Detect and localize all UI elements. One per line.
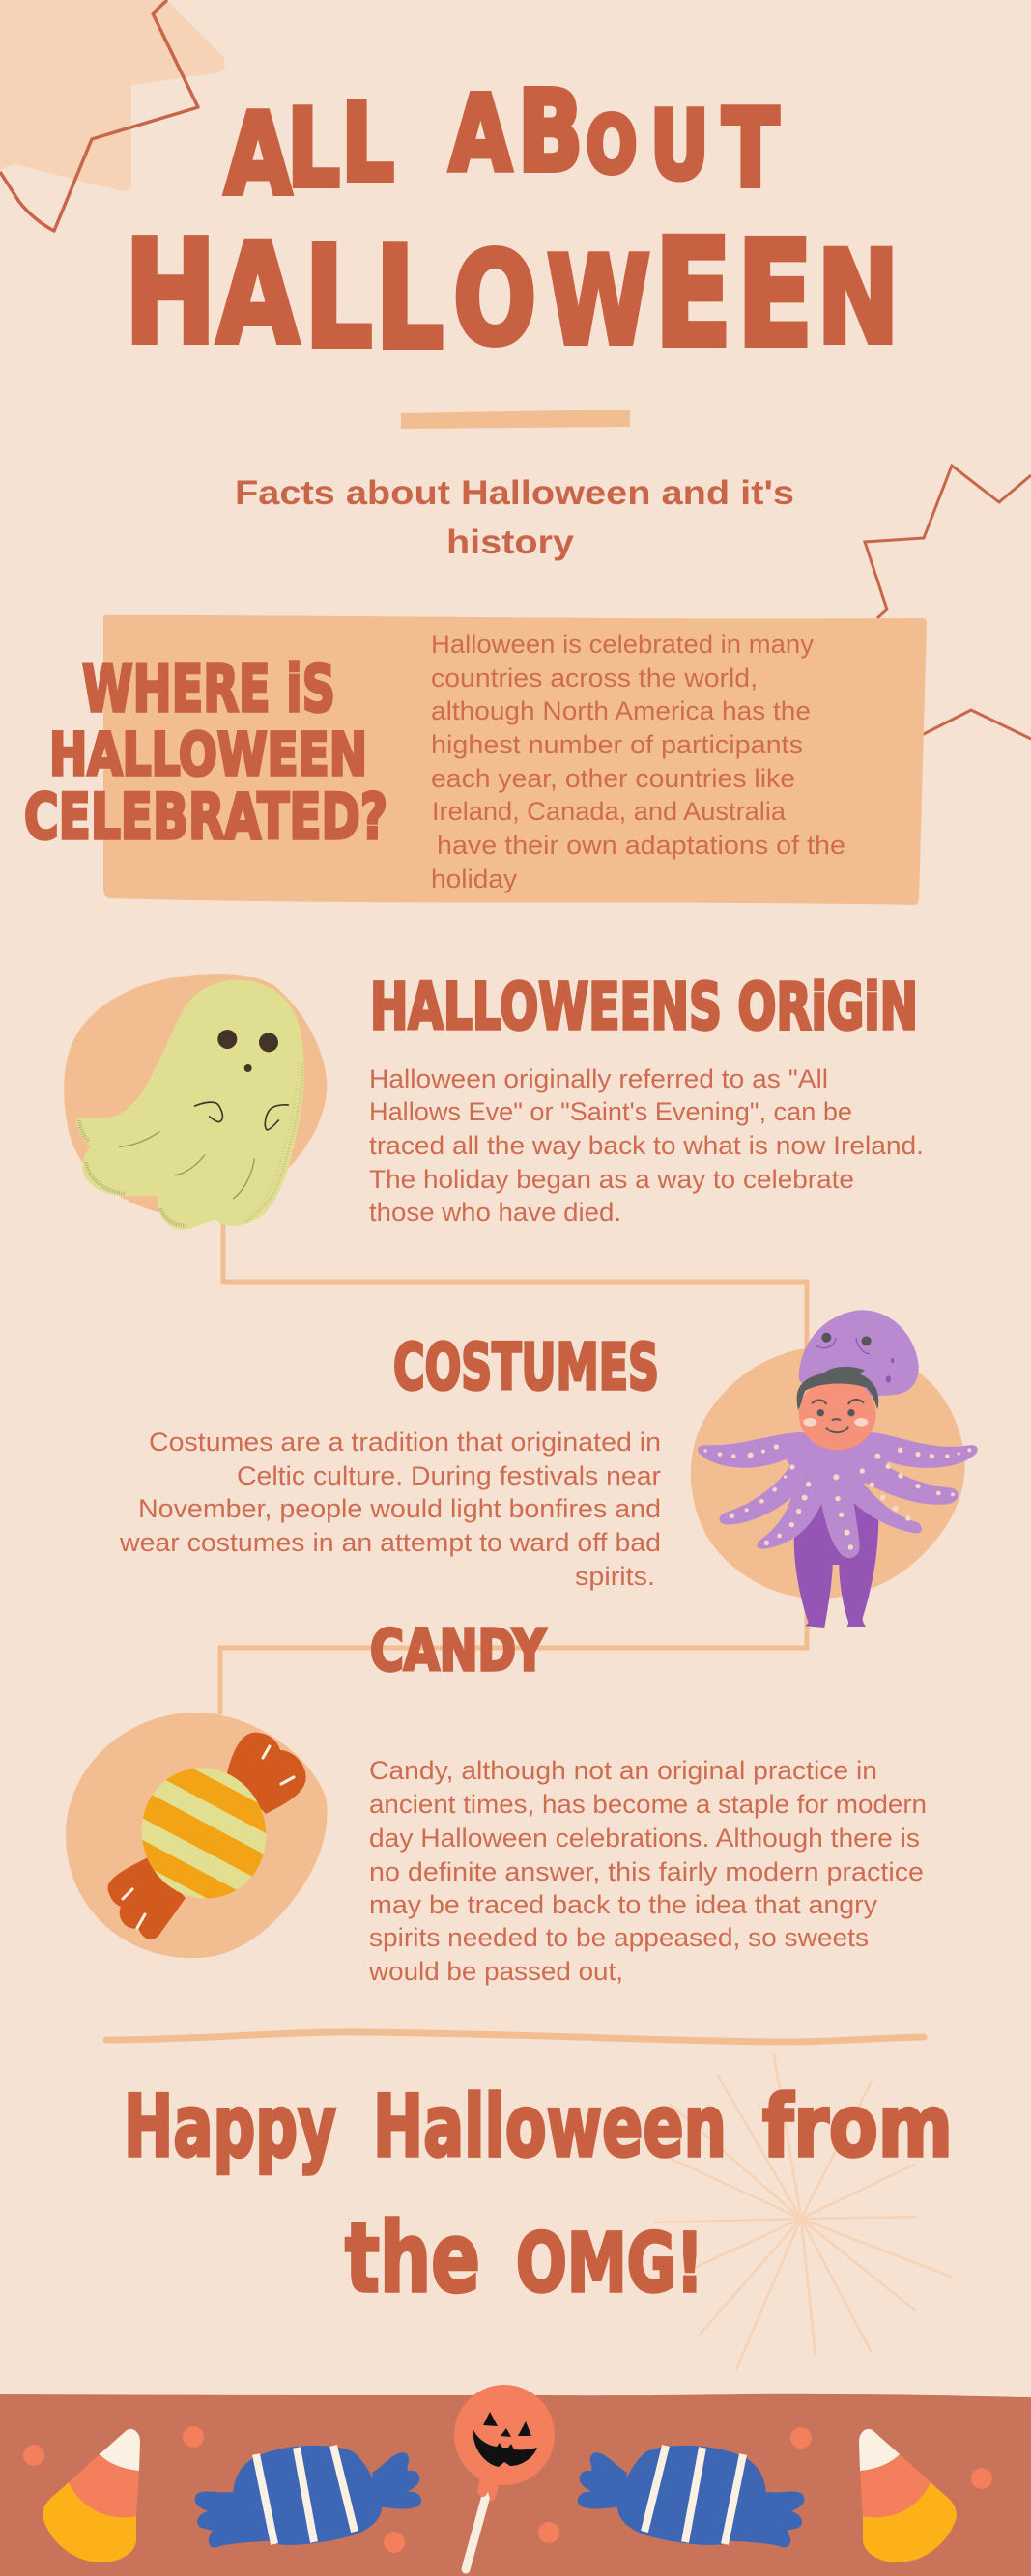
title line: ALL ABOUT: A: [225, 91, 292, 220]
decorative star outline: top left: [0, 0, 198, 231]
panel text: Halloween is celebrated in many: [431, 630, 814, 659]
panel text: countries across the world,: [431, 664, 758, 693]
costumes text: wear costumes in an attempt to ward off bad: [119, 1528, 661, 1557]
icon: ghost on blob: [64, 974, 327, 1230]
panel heading: WHERE iS: [82, 651, 335, 726]
confetti dots: [23, 2426, 992, 2553]
title line: HALLOWEEN: H: [125, 210, 216, 377]
title line: ALL ABOUT: A: [449, 73, 512, 195]
origin text: Halloween originally referred to as "All: [369, 1064, 828, 1093]
panel: candy: [66, 1617, 927, 1986]
title line: ALL ABOUT: O: [587, 100, 637, 190]
closing message: from: [762, 2077, 953, 2176]
closing message: the: [345, 2201, 480, 2314]
title line: HALLOWEEN: E: [736, 210, 814, 380]
icon: candy corn right: [859, 2429, 957, 2562]
candy text: no definite answer, this fairly modern practice: [369, 1857, 924, 1886]
panel text: have their own adaptations of the: [437, 831, 845, 860]
title line: HALLOWEEN: E: [654, 208, 732, 381]
title line: ALL ABOUT: L: [341, 81, 394, 206]
title line: HALLOWEEN: O: [453, 225, 536, 373]
band background: [0, 2394, 1031, 2576]
panel text: highest number of participants: [431, 730, 803, 759]
panel text: holiday: [431, 864, 518, 893]
panel text: each year, other countries like: [431, 764, 795, 793]
origin text: [369, 1064, 924, 1227]
title line: ALL ABOUT: B: [518, 69, 583, 197]
candy text: [368, 1756, 927, 1986]
icon: wrapped candy on blob: [66, 1713, 328, 1958]
panel text: although North America has the: [431, 696, 811, 725]
connector line: [220, 1222, 807, 1714]
decorative firework burst: [654, 2055, 951, 2369]
title line: HALLOWEEN: L: [375, 217, 444, 381]
costumes text: spirits.: [575, 1562, 655, 1591]
candy text: Candy, although not an original practice in: [369, 1756, 877, 1785]
panel: Halloweens origin: [64, 970, 924, 1230]
panel background: [103, 615, 927, 905]
icon: blue candy left: [195, 2446, 421, 2547]
title line: ALL ABOUT: L: [287, 87, 340, 212]
title line: HALLOWEEN: L: [304, 218, 373, 380]
decorative blob: top left: [0, 0, 225, 191]
title line: ALL ABOUT: U: [650, 92, 709, 201]
costumes text: November, people would light bonfires and: [138, 1494, 661, 1523]
accent bar under title: [401, 410, 630, 429]
title line: HALLOWEEN: A: [216, 215, 299, 376]
origin text: those who have died.: [369, 1198, 621, 1227]
heading: candy: CANDY: [370, 1617, 547, 1684]
heading: costumes: COSTUMES: [393, 1330, 659, 1404]
title: [125, 69, 900, 381]
panel heading: [24, 651, 387, 854]
title line: HALLOWEEN: W: [547, 230, 650, 372]
title line: ALL ABOUT: T: [723, 87, 779, 212]
icon: candy corn left: [43, 2429, 140, 2562]
candy text: day Halloween celebrations. Although there is: [369, 1824, 920, 1853]
panel: where is Halloween celebrated: [24, 615, 927, 905]
title line: HALLOWEEN: N: [816, 224, 900, 372]
origin text: The holiday began as a way to celebrate: [369, 1165, 854, 1194]
costumes text: Celtic culture. During festivals near: [237, 1461, 661, 1490]
candy text: may be traced back to the idea that angry: [369, 1890, 878, 1919]
candy text: would be passed out,: [368, 1957, 623, 1986]
panel heading: HALLOWEEN: [49, 721, 367, 789]
costumes text: [119, 1428, 661, 1591]
divider line: [106, 2032, 924, 2042]
origin text: Hallows Eve" or "Saint's Evening", can be: [369, 1097, 852, 1126]
decorative star outline: right: [865, 466, 1031, 739]
closing message: Halloween: [373, 2077, 727, 2176]
origin text: traced all the way back to what is now Ireland.: [369, 1131, 924, 1160]
icon: pumpkin lollipop: [454, 2385, 555, 2569]
icon: blue candy right: [578, 2446, 804, 2547]
closing message: OMG!: [516, 2216, 703, 2310]
icon: child in octopus costume on blob: [691, 1310, 975, 1628]
panel text: Ireland, Canada, and Australia: [432, 797, 787, 826]
panel text: [431, 630, 845, 893]
costumes text: Costumes are a tradition that originated in: [149, 1428, 661, 1457]
candy text: spirits needed to be appeased, so sweets: [369, 1923, 869, 1952]
panel heading: CELEBRATED?: [24, 781, 387, 854]
candy text: ancient times, has become a staple for modern: [369, 1790, 927, 1819]
subtitle: history: [446, 524, 575, 561]
closing message: [124, 2077, 953, 2314]
panel: costumes: [119, 1310, 975, 1628]
subtitle: Facts about Halloween and it's: [235, 474, 794, 512]
closing message: Happy: [124, 2077, 336, 2176]
footer band: [0, 2385, 1031, 2576]
subtitle: [235, 474, 794, 561]
